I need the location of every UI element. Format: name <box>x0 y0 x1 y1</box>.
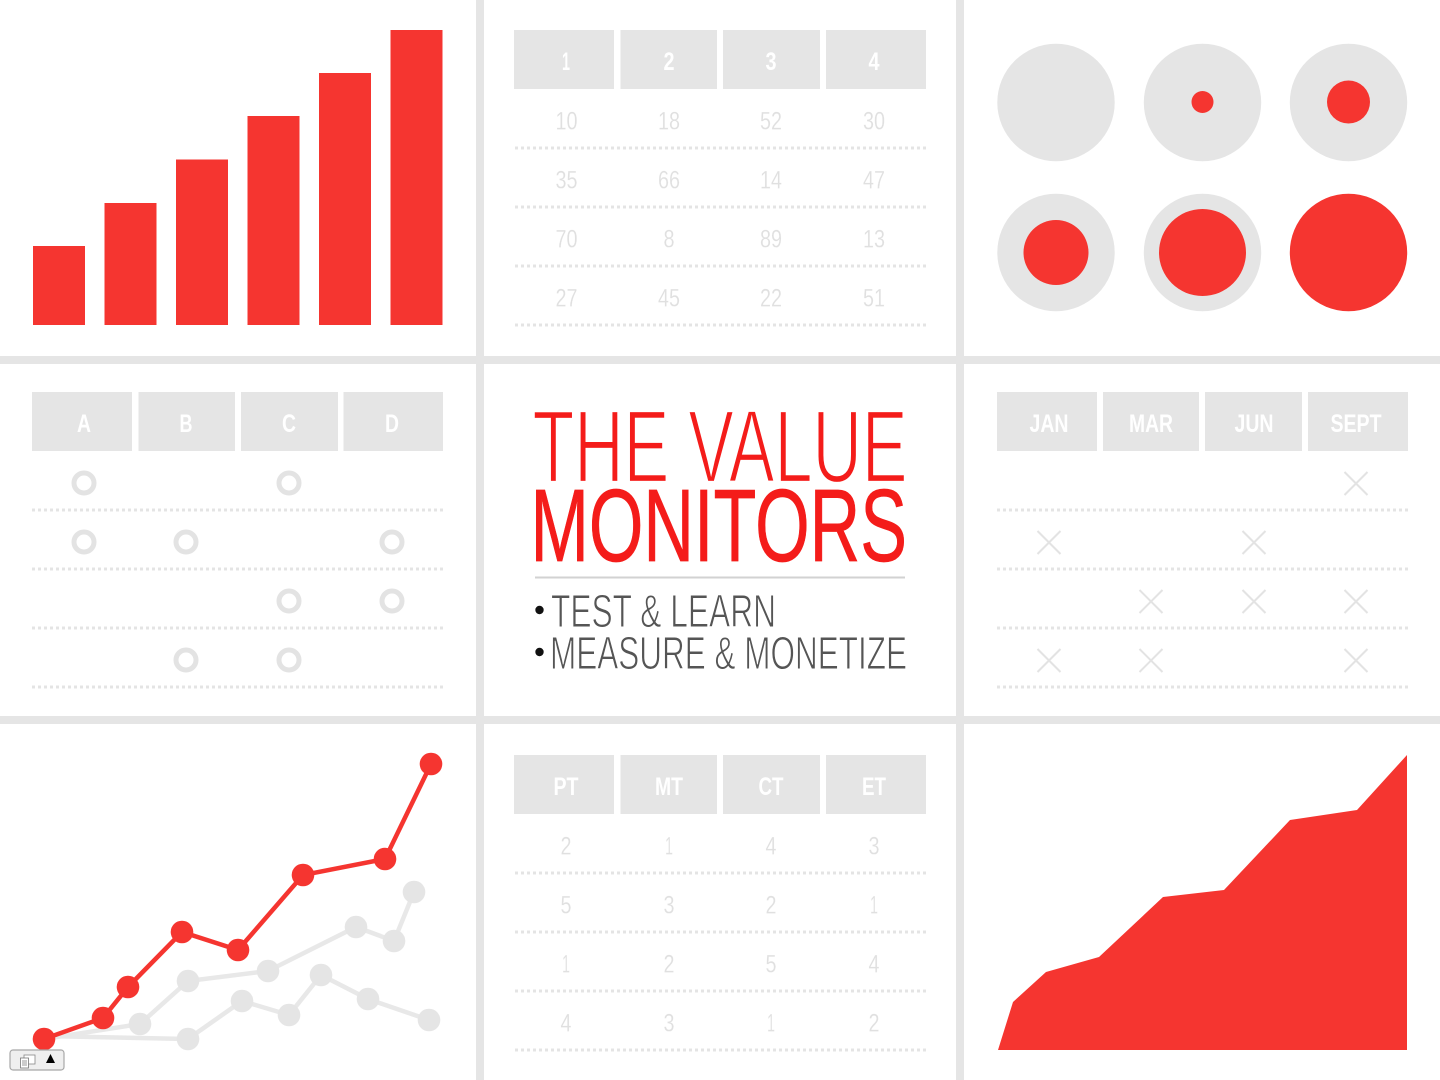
table header 1 to 4: 4 <box>868 48 880 76</box>
table header A to D: D <box>385 410 399 438</box>
table rows: 30 <box>863 108 885 136</box>
table rows: 18 <box>658 108 680 136</box>
table rows <box>515 832 926 1050</box>
table rows: 51 <box>863 284 885 312</box>
table rows <box>515 108 926 325</box>
table header 1 to 4 <box>514 30 926 89</box>
bullet: test and learn <box>535 585 776 637</box>
table rows: 4 <box>868 950 880 978</box>
bullet: test and learn: TEST & LEARN <box>551 585 776 637</box>
table header 1 to 4: 3 <box>766 48 776 76</box>
panel: title <box>530 389 908 679</box>
table header time zones: ET <box>862 773 886 801</box>
table rows: 2 <box>664 950 674 978</box>
table header time zones <box>514 755 926 814</box>
table rows: 22 <box>760 284 782 312</box>
panel: progress circles <box>997 44 1407 311</box>
table rows: 1 <box>767 1010 775 1038</box>
table rows: 8 <box>664 226 674 254</box>
table rows: 35 <box>556 166 578 194</box>
title line one: THE VALUE <box>532 389 908 504</box>
bullet: measure and monetize <box>535 627 907 679</box>
table rows: 47 <box>863 166 885 194</box>
panel: time zone table <box>514 755 926 1050</box>
bullet: measure and monetize: MEASURE & MONETIZE <box>550 627 907 679</box>
table header months: JAN <box>1030 410 1068 438</box>
table header time zones: CT <box>758 773 784 801</box>
table header 1 to 4: 2 <box>664 48 674 76</box>
table header months: SEPT <box>1330 410 1382 438</box>
table rows: 4 <box>560 1010 572 1038</box>
red series <box>33 753 442 1050</box>
table rows: 1 <box>870 892 878 920</box>
table header months <box>997 392 1408 451</box>
panel: line chart <box>33 753 442 1050</box>
table rows: 1 <box>562 950 570 978</box>
table rows: 2 <box>868 1010 880 1038</box>
table header A to D <box>32 392 443 451</box>
cross markers <box>1038 472 1368 672</box>
table rows: 52 <box>760 108 782 136</box>
table rows: 4 <box>766 832 777 860</box>
table rows: 10 <box>556 108 578 136</box>
table rows: 3 <box>664 892 674 920</box>
table rows: 14 <box>760 166 782 194</box>
panel: bar chart <box>33 30 442 325</box>
table header time zones: PT <box>554 773 578 801</box>
table rows: 2 <box>766 892 776 920</box>
table rows: 3 <box>868 832 880 860</box>
table header 1 to 4: 1 <box>562 48 570 76</box>
table header A to D: C <box>282 410 296 438</box>
table rows: 66 <box>658 166 680 194</box>
grey series two <box>44 964 440 1050</box>
table rows: 70 <box>556 226 578 254</box>
table rows: 89 <box>760 226 782 254</box>
icon: paste options button <box>10 1050 64 1070</box>
table header A to D: A <box>77 410 91 438</box>
table rows: 13 <box>863 226 885 254</box>
table header time zones: MT <box>655 773 683 801</box>
table rows: 2 <box>560 832 572 860</box>
table rows: 45 <box>658 284 680 312</box>
title line two: MONITORS <box>530 468 907 583</box>
table header months: MAR <box>1129 410 1173 438</box>
ring markers <box>74 473 402 670</box>
table rows: 3 <box>664 1010 674 1038</box>
table header months: JUN <box>1234 410 1274 438</box>
panel: cross matrix table <box>997 392 1408 687</box>
table rows: 27 <box>556 284 578 312</box>
table rows: 5 <box>766 950 776 978</box>
table rows: 5 <box>560 892 572 920</box>
panel: ring matrix table <box>32 392 443 687</box>
grey series one <box>44 881 425 1039</box>
table rows: 1 <box>665 832 673 860</box>
panel: number table <box>514 30 926 325</box>
panel: area chart <box>998 755 1407 1050</box>
table header A to D: B <box>180 410 192 438</box>
